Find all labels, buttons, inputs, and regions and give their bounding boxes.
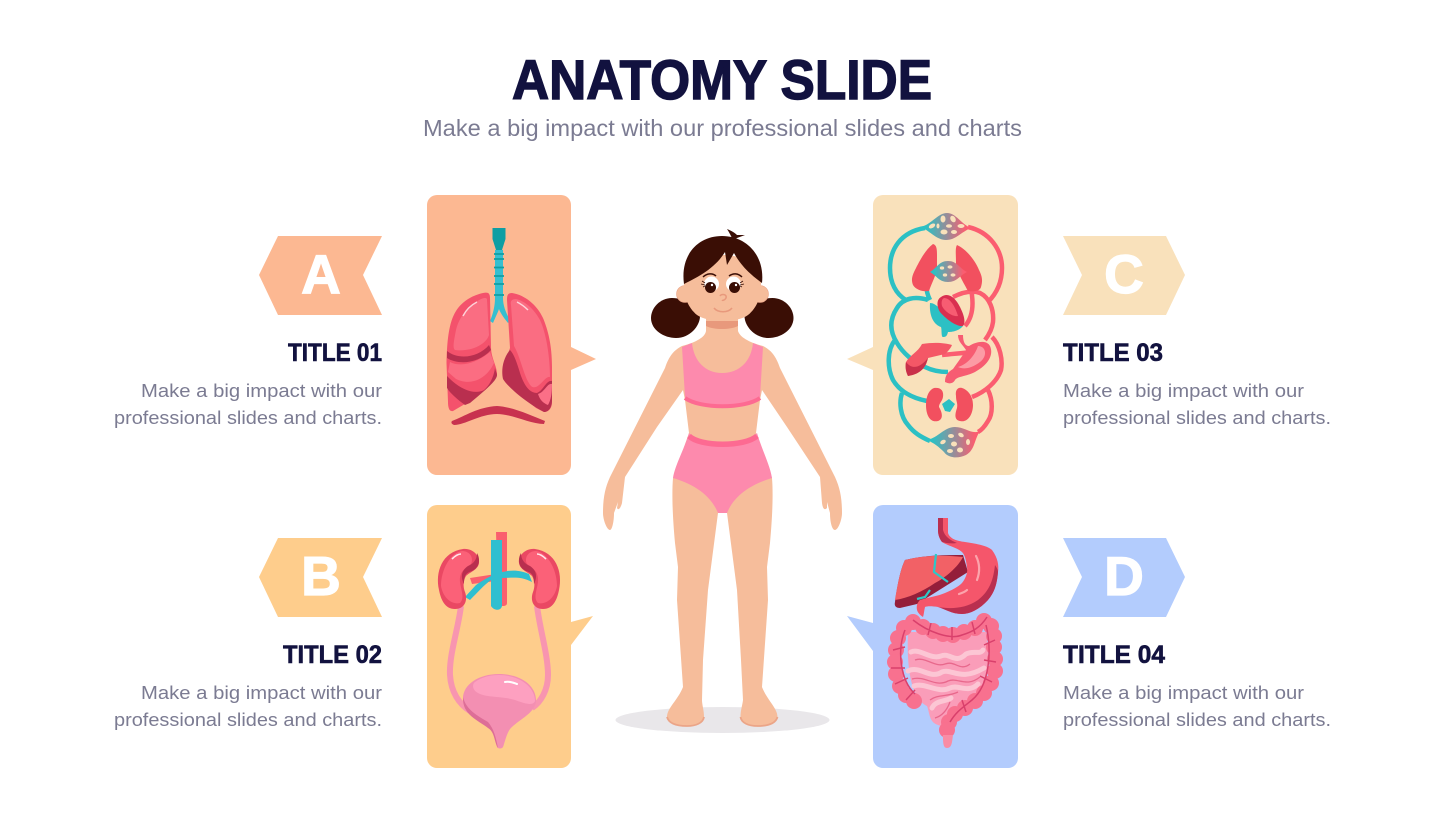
icon: trachea	[490, 228, 510, 323]
icon: small intestine	[908, 632, 988, 726]
speech panel background	[427, 195, 596, 475]
description B: Make a big impact with our	[141, 682, 382, 703]
waist band	[689, 436, 757, 444]
description D	[1063, 682, 1331, 730]
arrow badge B: B	[301, 545, 341, 607]
arrow badge D	[1063, 538, 1185, 617]
left column: item B	[114, 538, 382, 730]
icon: ureters	[450, 606, 548, 711]
icon: bladder	[463, 674, 536, 748]
description B	[114, 682, 382, 730]
foot shading	[667, 717, 778, 726]
speech panel background	[427, 505, 593, 768]
neck shadow	[706, 321, 738, 329]
icon: liver	[895, 554, 968, 608]
ground shadow	[616, 707, 830, 733]
icon: bottom capillary net	[927, 427, 980, 457]
icon: stomach	[917, 518, 998, 617]
description D: professional slides and charts.	[1063, 709, 1331, 730]
speech panel background	[847, 505, 1018, 768]
heading: title 01: TITLE 01	[288, 339, 382, 367]
icon: liver	[906, 343, 952, 376]
description C: professional slides and charts.	[1063, 407, 1331, 428]
hair	[683, 229, 762, 284]
panel B: urinary system	[427, 505, 593, 768]
left column: item A	[114, 236, 382, 428]
icon: upper lung lobes	[912, 244, 982, 291]
nose and mouth	[714, 294, 732, 312]
icon: right lung	[502, 293, 552, 412]
description C: Make a big impact with our	[1063, 380, 1304, 401]
right column: item D	[1063, 538, 1331, 730]
subtitle: Make a big impact with our professional slides and charts	[423, 115, 1022, 141]
description A: professional slides and charts.	[114, 407, 382, 428]
speech panel background	[847, 195, 1018, 475]
arrow badge B	[259, 538, 382, 617]
briefs	[673, 433, 772, 513]
arrow badge D: D	[1104, 545, 1144, 607]
title: ANATOMY SLIDE	[512, 48, 932, 111]
icon: left kidney	[438, 549, 479, 609]
eyes	[701, 274, 744, 293]
central figure: girl	[603, 229, 842, 733]
icon: diaphragm	[451, 406, 545, 425]
panel C: circulatory system	[847, 195, 1018, 475]
icon: middle capillary net	[930, 261, 967, 282]
arrow badge C: C	[1104, 243, 1144, 305]
panel A: lungs	[427, 195, 596, 475]
bra top	[682, 343, 763, 405]
description B: professional slides and charts.	[114, 709, 382, 730]
description C	[1063, 380, 1331, 428]
arrow badge C	[1063, 236, 1185, 315]
arrow badge A: A	[301, 243, 341, 305]
icon: red vessels	[942, 227, 1002, 432]
description A	[114, 380, 382, 428]
icon: blood vessels	[465, 532, 532, 610]
hair pigtails	[651, 298, 794, 338]
description D: Make a big impact with our	[1063, 682, 1304, 703]
heading: title 02: TITLE 02	[283, 641, 382, 669]
icon: mid stomach	[945, 335, 991, 383]
description A: Make a big impact with our	[141, 380, 382, 401]
heading: title 04: TITLE 04	[1063, 641, 1165, 669]
icon: left lung	[446, 293, 497, 411]
ears	[676, 286, 768, 302]
face	[684, 255, 761, 321]
arrow badge A	[259, 236, 382, 315]
panel D: digestive system	[847, 505, 1018, 768]
heading: title 03: TITLE 03	[1063, 339, 1163, 367]
icon: right kidney	[519, 549, 560, 609]
icon: large intestine	[887, 613, 1003, 748]
right column: item C	[1063, 236, 1331, 428]
icon: small kidneys	[926, 388, 973, 421]
bra band	[685, 398, 760, 406]
body skin	[603, 316, 842, 726]
icon: teal vessels	[889, 228, 948, 441]
icon: heart	[930, 295, 964, 337]
icon: top capillary net	[921, 213, 971, 240]
